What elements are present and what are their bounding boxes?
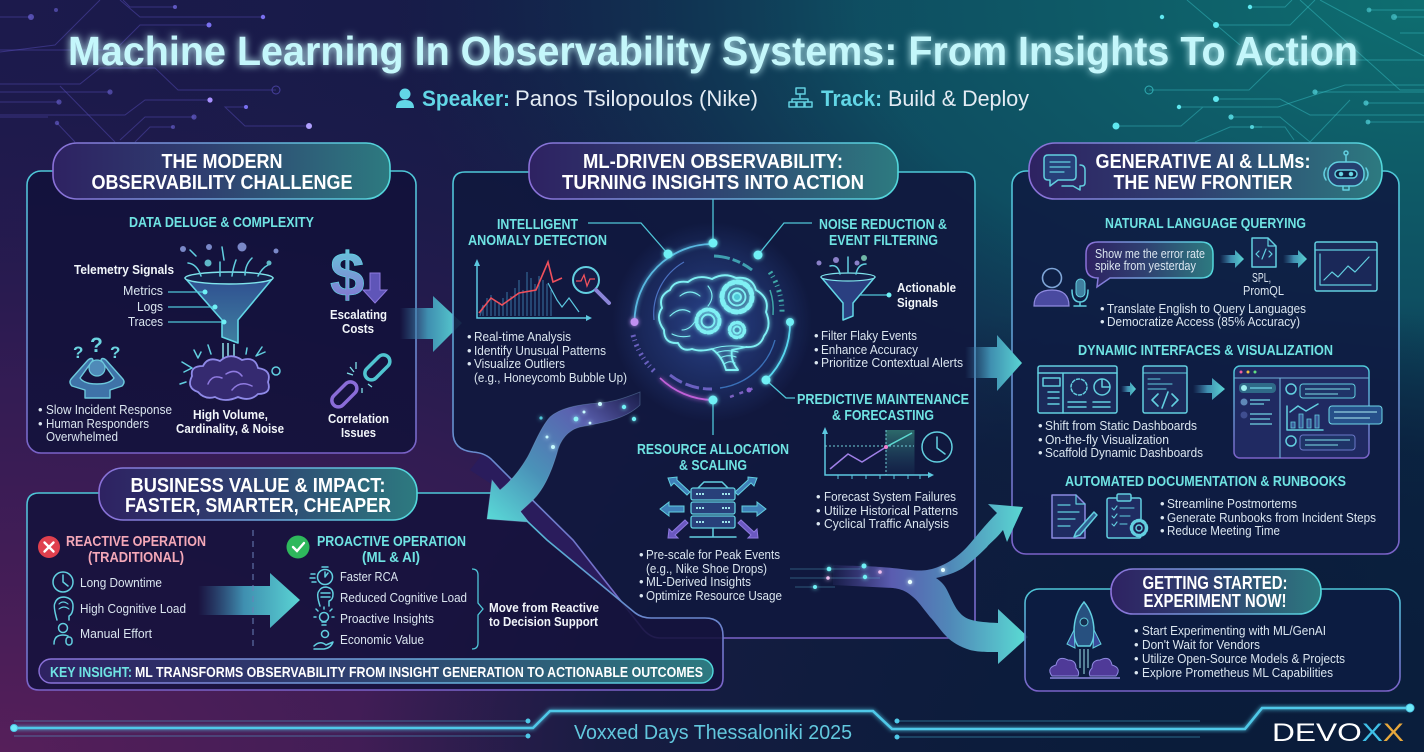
icon: manual effort person	[54, 624, 72, 645]
bullets: dynamic interfaces: On-the-fly Visualization	[1045, 432, 1169, 447]
icon: speaker	[396, 88, 414, 108]
reactive heading: (TRADITIONAL)	[88, 549, 184, 566]
bullets: dynamic interfaces: •	[1038, 418, 1043, 433]
speaker name: Panos Tsilopoulos (Nike)	[515, 86, 758, 111]
heading pill: EXPERIMENT NOW!	[1144, 591, 1286, 611]
resource allocation heading: RESOURCE ALLOCATION	[637, 441, 789, 458]
icon: code window	[1143, 366, 1187, 413]
arrow: challenge to ml-driven	[400, 296, 462, 352]
panel: business value and impact	[27, 468, 723, 690]
key insight bar: ML TRANSFORMS OBSERVABILITY FROM INSIGHT GENERATION TO ACTIONABLE OUTCOMES	[135, 665, 703, 681]
label: actionable signals: Actionable	[897, 280, 956, 295]
bullets: anomaly detection: Identify Unusual Patterns	[474, 343, 606, 358]
noise reduction heading: EVENT FILTERING	[829, 232, 938, 249]
bullets: automated documentation: •	[1160, 496, 1165, 511]
icon: overwhelmed person: ?	[110, 343, 120, 362]
bullets: noise reduction: Enhance Accuracy	[821, 342, 918, 357]
reactive list: Manual Effort	[80, 626, 152, 641]
icon: static dashboard	[1038, 366, 1117, 413]
bullets: querying: Democratize Access (85% Accuracy)	[1107, 314, 1300, 329]
panel: getting started	[1025, 569, 1400, 691]
noise reduction heading: NOISE REDUCTION &	[819, 216, 947, 233]
bullets: resource allocation: Pre-scale for Peak Events	[646, 547, 780, 562]
connector nodes	[630, 238, 794, 404]
arrow: ml-driven to business value	[487, 392, 640, 522]
track name: Build & Deploy	[888, 86, 1029, 111]
icon: overwhelmed person	[70, 334, 124, 398]
heading pill	[529, 143, 898, 199]
bullets: automated documentation: Generate Runbooks from Incident Steps	[1167, 510, 1376, 525]
icon: escalating costs: $	[330, 241, 364, 310]
bullets: resource allocation: •	[639, 574, 644, 589]
icon: overwhelmed person: ?	[90, 334, 103, 357]
bullets: getting started: •	[1134, 637, 1139, 652]
icon: clipboard with gear	[1107, 494, 1146, 538]
icon: broken chain	[329, 352, 393, 410]
icon: escalating costs	[330, 241, 387, 310]
bullets: anomaly detection: Real-time Analysis	[474, 329, 571, 344]
bullets: dynamic interfaces: •	[1038, 445, 1043, 460]
key insight bar	[39, 659, 713, 683]
icon: dynamic dashboard	[1234, 366, 1382, 458]
reactive heading: REACTIVE OPERATION	[66, 533, 206, 550]
bullets: getting started: Utilize Open-Source Models & Projects	[1142, 651, 1345, 666]
label: move from reactive: to Decision Support	[489, 614, 599, 629]
heading pill: THE MODERN	[162, 151, 282, 173]
proactive heading: PROACTIVE OPERATION	[317, 533, 466, 550]
bullets: anomaly detection: •	[467, 343, 472, 358]
bullets: dynamic interfaces: Scaffold Dynamic Dashboards	[1045, 445, 1203, 460]
bullets: getting started	[1134, 623, 1345, 680]
label: correlation issues: Correlation	[328, 411, 389, 426]
arrow: ml-driven to generative ai	[965, 335, 1022, 391]
bullets: forecasting: Utilize Historical Patterns	[824, 503, 958, 518]
heading pill	[53, 143, 390, 199]
arrow: dashboard to code	[1121, 382, 1136, 396]
bullets: response: Overwhelmed	[46, 429, 118, 444]
bullets: noise reduction: Filter Flaky Events	[821, 328, 917, 343]
bullets: automated documentation: •	[1160, 523, 1165, 538]
title: Machine Learning In Observability Systems: From Insights To Action	[68, 28, 1358, 74]
reactive list	[53, 572, 186, 645]
arrow: code to interface	[1193, 378, 1225, 400]
icon: insight bulb	[314, 607, 334, 625]
icon: clock	[53, 572, 73, 592]
bullets: resource allocation: (e.g., Nike Shoe Drops)	[646, 561, 767, 576]
telemetry signals labels: Telemetry Signals	[74, 262, 174, 277]
icon: reduced load head	[318, 587, 333, 606]
panel: the modern observability challenge	[27, 143, 416, 453]
bullets: getting started: Explore Prometheus ML Capabilities	[1142, 665, 1333, 680]
subtitle: speaker and track	[396, 86, 1029, 111]
bullets: resource allocation: Optimize Resource Usage	[646, 588, 782, 603]
resource allocation heading	[637, 441, 789, 474]
heading pill: OBSERVABILITY CHALLENGE	[92, 172, 352, 194]
key insight bar: KEY INSIGHT:	[50, 665, 132, 681]
label: high volume: Cardinality, & Noise	[176, 421, 284, 436]
label: spl promql: PromQL	[1243, 283, 1284, 298]
arrow: query to language	[1220, 250, 1244, 268]
bullets: response	[38, 402, 172, 444]
icon: code file	[1252, 238, 1276, 267]
icon: reactive x	[38, 536, 60, 558]
label: move from reactive: Move from Reactive	[489, 600, 599, 615]
subheading: natural language querying: NATURAL LANGUAGE QUERYING	[1105, 215, 1306, 232]
bullets: dynamic interfaces: Shift from Static Dashboards	[1045, 418, 1197, 433]
heading pill: TURNING INSIGHTS INTO ACTION	[562, 172, 864, 194]
bullets: querying: Translate English to Query Languages	[1107, 301, 1306, 316]
brain outline	[659, 275, 769, 370]
proactive heading	[317, 533, 466, 566]
dashed divider	[252, 530, 254, 650]
bullets: anomaly detection: •	[467, 329, 472, 344]
predictive maintenance heading	[797, 391, 969, 424]
bullets: anomaly detection: •	[467, 356, 472, 371]
bullets: dynamic interfaces	[1038, 418, 1203, 460]
heading pill: THE NEW FRONTIER	[1114, 172, 1293, 194]
chart: anomaly line chart	[474, 259, 609, 321]
anomaly detection heading: INTELLIGENT	[497, 216, 578, 233]
logo: devoxx: DEVO XX	[1272, 719, 1404, 747]
icon: stopwatch	[310, 567, 332, 584]
heading pill	[99, 468, 417, 520]
bullets: automated documentation: Reduce Meeting Time	[1167, 523, 1280, 538]
icon: cognitive head	[54, 597, 73, 620]
label: high volume: High Volume,	[193, 407, 268, 422]
bullets: anomaly detection: Visualize Outliers	[474, 356, 565, 371]
bullets: anomaly detection: (e.g., Honeycomb Bubble Up)	[474, 370, 627, 385]
bullets: automated documentation	[1160, 496, 1376, 538]
panel: generative ai and llms	[1012, 143, 1399, 554]
icon: server scaling	[660, 477, 766, 538]
chart: forecast	[822, 427, 952, 479]
predictive maintenance heading: PREDICTIVE MAINTENANCE	[797, 391, 969, 408]
central brain hub	[612, 222, 812, 422]
bullets: noise reduction: •	[814, 328, 819, 343]
bullets: anomaly detection	[467, 329, 627, 385]
heading pill: BUSINESS VALUE & IMPACT:	[130, 475, 386, 497]
icon: user with microphone	[1034, 268, 1088, 306]
bullets: forecasting: •	[816, 503, 821, 518]
speech bubble query	[1086, 242, 1213, 287]
proactive list: Proactive Insights	[340, 611, 434, 626]
icon: document with pen	[1052, 495, 1097, 538]
bullets: forecasting: •	[816, 516, 821, 531]
bullets: noise reduction: •	[814, 355, 819, 370]
bullets: response: •	[38, 402, 43, 417]
speaker label: Speaker:	[422, 86, 510, 111]
noise reduction heading	[819, 216, 947, 249]
bullets: forecasting: •	[816, 489, 821, 504]
label: high volume	[176, 407, 284, 436]
bullets: response: Slow Incident Response	[46, 402, 172, 417]
anomaly detection heading	[468, 216, 607, 249]
label: correlation issues	[328, 411, 389, 440]
label: escalating costs: Costs	[342, 321, 374, 336]
heading pill	[1111, 569, 1321, 614]
telemetry signals labels: Traces	[128, 314, 163, 329]
bullets: getting started: •	[1134, 651, 1139, 666]
icon: track	[789, 88, 812, 107]
heading pill	[1029, 143, 1382, 199]
bullets: resource allocation: •	[639, 547, 644, 562]
footer text: Voxxed Days Thessaloniki 2025	[574, 722, 852, 744]
label: move from reactive	[489, 600, 599, 629]
bullets: dynamic interfaces: •	[1038, 432, 1043, 447]
bullets: getting started: Start Experimenting with ML/GenAI	[1142, 623, 1326, 638]
icon: noise cloud	[180, 345, 280, 400]
bullets: forecasting: Forecast System Failures	[824, 489, 956, 504]
proactive list: Economic Value	[340, 632, 424, 647]
resource allocation heading: & SCALING	[679, 457, 747, 474]
bullets: noise reduction	[814, 328, 963, 370]
proactive list: Faster RCA	[340, 569, 398, 584]
speech bubble query: spike from yesterday	[1095, 258, 1196, 273]
bullets: querying: •	[1100, 314, 1105, 329]
label: escalating costs	[330, 307, 387, 336]
heading pill: FASTER, SMARTER, CHEAPER	[125, 495, 391, 517]
proactive list: Reduced Cognitive Load	[340, 590, 467, 605]
heading pill: GETTING STARTED:	[1142, 573, 1288, 593]
label: escalating costs: Escalating	[330, 307, 387, 322]
icon: economic hand	[314, 630, 333, 649]
subheading: dynamic interfaces: DYNAMIC INTERFACES & VISUALIZATION	[1078, 342, 1333, 359]
reactive heading	[66, 533, 206, 566]
arrow: reactive to proactive	[198, 573, 300, 628]
telemetry signals labels	[74, 262, 174, 329]
bullets: querying	[1100, 301, 1306, 329]
connectors	[588, 199, 812, 435]
proactive heading: (ML & AI)	[362, 549, 420, 566]
label: actionable signals	[897, 280, 956, 310]
anomaly detection heading: ANOMALY DETECTION	[468, 232, 607, 249]
bullets: noise reduction: •	[814, 342, 819, 357]
label: spl promql: SPL,	[1252, 270, 1271, 285]
speech bubble query: Show me the error rate	[1095, 246, 1205, 261]
footer circuit line	[10, 704, 1414, 739]
proactive list	[310, 567, 467, 649]
bullets: automated documentation: •	[1160, 510, 1165, 525]
telemetry signals labels: Metrics	[123, 283, 163, 298]
label: correlation issues: Issues	[341, 425, 376, 440]
bullets: querying: •	[1100, 301, 1105, 316]
icon: robot	[1324, 151, 1368, 190]
bullets: response: •	[38, 416, 43, 431]
telemetry signals labels: Logs	[137, 299, 163, 314]
icon: overwhelmed person: ?	[73, 343, 83, 362]
icon: rocket	[1050, 602, 1120, 678]
icon: noise filter funnel	[816, 255, 892, 320]
bullets: resource allocation	[639, 547, 782, 603]
icon: funnel	[168, 242, 278, 362]
bullets: forecasting: Cyclical Traffic Analysis	[824, 516, 949, 531]
arrow: flow splitting to generative ai and getting started	[790, 504, 1028, 664]
subheading: automated documentation: AUTOMATED DOCUMENTATION & RUNBOOKS	[1065, 473, 1346, 490]
bullets: forecasting	[816, 489, 958, 531]
bullets: getting started: •	[1134, 665, 1139, 680]
icon: proactive check	[286, 536, 310, 558]
heading pill: GENERATIVE AI & LLMs:	[1096, 151, 1310, 173]
subheading: DATA DELUGE & COMPLEXITY	[129, 214, 314, 231]
icon: chart window	[1315, 242, 1377, 291]
arrow: language to chart	[1283, 250, 1307, 268]
brace	[472, 569, 483, 649]
bullets: getting started: Don't Wait for Vendors	[1142, 637, 1260, 652]
label: spl promql	[1243, 270, 1284, 298]
bullets: resource allocation: •	[639, 588, 644, 603]
bullets: noise reduction: Prioritize Contextual Alerts	[821, 355, 963, 370]
heading pill: ML-DRIVEN OBSERVABILITY:	[583, 151, 843, 173]
bullets: resource allocation: ML-Derived Insights	[646, 574, 751, 589]
label: actionable signals: Signals	[897, 295, 938, 310]
track label: Track:	[821, 86, 882, 111]
reactive list: High Cognitive Load	[80, 601, 186, 616]
channel between panels	[470, 452, 723, 638]
bullets: automated documentation: Streamline Postmortems	[1167, 496, 1297, 511]
bullets: getting started: •	[1134, 623, 1139, 638]
predictive maintenance heading: & FORECASTING	[832, 407, 934, 424]
icon: chat bubbles	[1044, 155, 1085, 190]
panel: ml-driven observability	[453, 143, 975, 638]
reactive list: Long Downtime	[80, 575, 162, 590]
bullets: response: Human Responders	[46, 416, 149, 431]
